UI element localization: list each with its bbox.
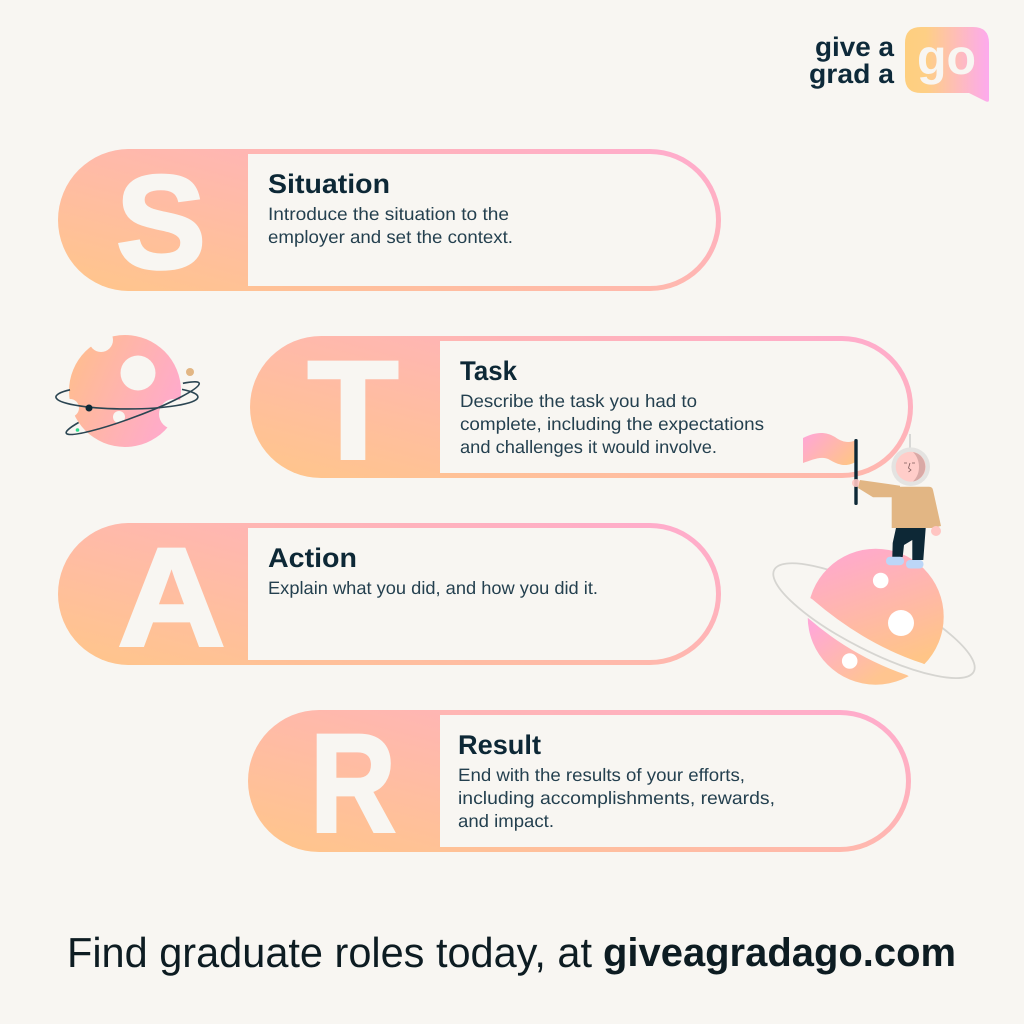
panel: task (250, 332, 913, 488)
heading: Task (460, 356, 518, 386)
heading: Situation (268, 169, 390, 199)
planet upper part (810, 548, 944, 664)
body text (458, 765, 775, 831)
helmet (891, 447, 930, 486)
logo wordmark: grad a (809, 59, 895, 89)
hand (852, 479, 860, 487)
illustration: astronaut with flag (803, 433, 941, 568)
planet lower part (808, 618, 909, 685)
body text: employer and set the context. (268, 227, 513, 247)
footer call to action: giveagradago.com (603, 931, 956, 975)
pill background (248, 710, 911, 852)
pill inner (440, 715, 906, 847)
orbit rings (56, 382, 199, 434)
body text (268, 204, 513, 247)
letter R: R (310, 704, 396, 862)
body text (460, 391, 764, 457)
logo go text: go (917, 29, 976, 85)
dark dot (86, 404, 92, 412)
legs (892, 528, 926, 560)
jumper (892, 487, 941, 528)
body text: Explain what you did, and how you did it. (268, 578, 598, 598)
pill background (250, 336, 913, 478)
footer call to action (67, 929, 956, 976)
heading: Result (458, 730, 541, 760)
craters (842, 573, 914, 669)
arm (858, 480, 900, 497)
planet body (69, 335, 181, 447)
panel: situation (58, 149, 721, 297)
logo: give a grad a go (809, 27, 989, 102)
craters (61, 328, 189, 429)
pill background (58, 149, 721, 291)
ring (761, 543, 987, 698)
body text: Introduce the situation to the (268, 204, 509, 224)
panel: action (58, 518, 721, 676)
flag (803, 433, 857, 465)
footer call to action: Find graduate roles today, at (67, 929, 592, 976)
tan moon (186, 368, 194, 376)
facial features (904, 463, 915, 472)
pill inner (248, 154, 716, 286)
face shadow (913, 452, 925, 482)
heading: Action (268, 543, 357, 573)
pill background (58, 523, 721, 665)
pill inner (440, 341, 908, 473)
panel: result (248, 704, 911, 862)
body text: and impact. (458, 811, 554, 831)
letter T: T (308, 332, 398, 488)
flag pole (854, 439, 858, 505)
body text: including accomplishments, rewards, (458, 788, 775, 808)
logo speech bubble (905, 27, 989, 102)
logo wordmark: give a (815, 32, 895, 62)
face (896, 452, 926, 482)
letter S: S (116, 149, 206, 297)
other hand (931, 526, 941, 536)
green dot (76, 428, 79, 432)
body text: Describe the task you had to (460, 391, 697, 411)
illustration: ringed planet (772, 548, 976, 685)
icon: small planet with orbits (56, 328, 199, 447)
shoes (886, 557, 924, 568)
antenna (909, 434, 911, 452)
letter A: A (118, 518, 226, 676)
body text: and challenges it would involve. (460, 437, 717, 457)
body text: complete, including the expectations (460, 414, 764, 434)
logo wordmark (809, 32, 895, 89)
pill inner (248, 528, 716, 660)
body text: End with the results of your efforts, (458, 765, 745, 785)
